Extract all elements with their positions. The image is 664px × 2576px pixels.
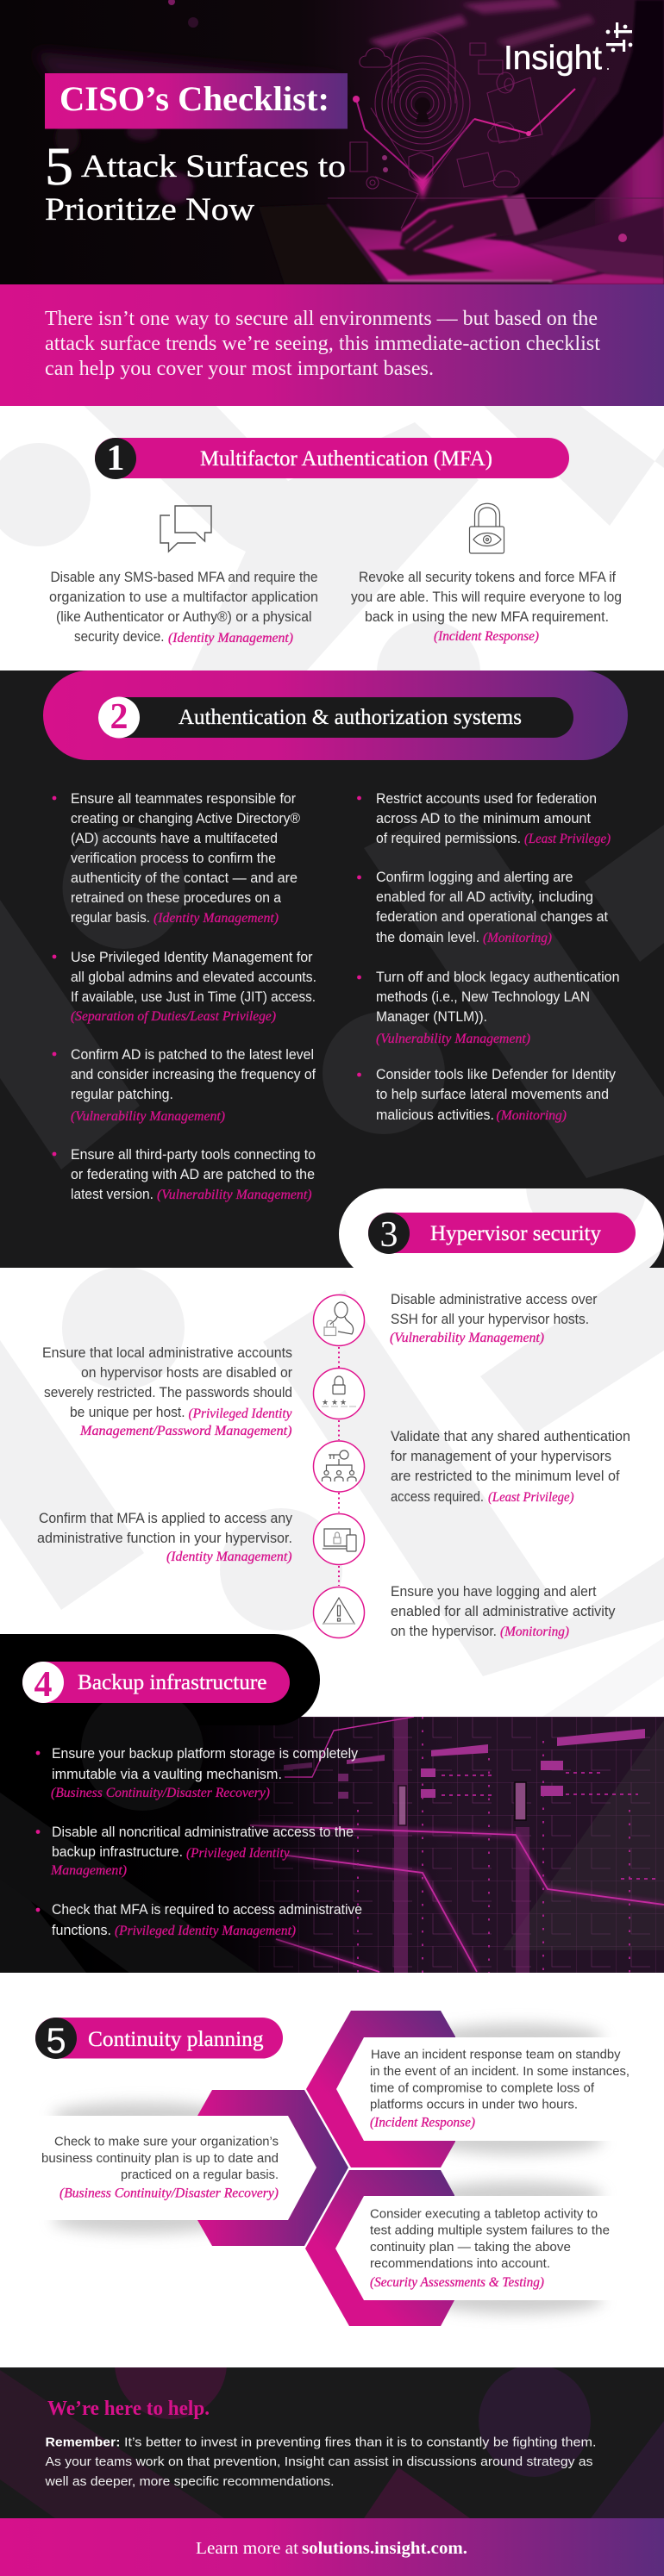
hypervisor text: shared authentication: access required. [391, 1489, 484, 1505]
hypervisor text: local accounts: be unique per host. [70, 1405, 185, 1420]
hypervisor text: local accounts: Ensure that local administrative accounts [42, 1345, 292, 1361]
intro band: can help you cover your most important bases. [45, 358, 434, 380]
hypervisor text: disable SSH: Disable administrative access over [391, 1292, 598, 1307]
hypervisor text: local accounts: Management/Password Management) [79, 1424, 291, 1438]
hypervisor text: MFA: (Identity Management) [166, 1550, 291, 1564]
section 2 bullet list: right column [357, 791, 619, 1123]
section 2 heading: Authentication & authorization systems [179, 706, 522, 729]
number badge 1: 1 [107, 439, 124, 478]
panel: section 3 background [0, 1188, 664, 1676]
panel: hex card bottom right: (Security Assessments & Testing) [370, 2275, 544, 2290]
hologram: padlock and security icons [350, 29, 542, 228]
section 2 bullet list: left column: regular patching. [71, 1087, 173, 1102]
hypervisor text: shared authentication [391, 1429, 630, 1505]
hypervisor text: local accounts: (Privileged Identity [188, 1407, 292, 1421]
hypervisor text: logging: Ensure you have logging and alert [391, 1584, 597, 1600]
section 2 bullet list: right column: to help surface lateral movements and [376, 1087, 609, 1102]
MFA text: right: Revoke all security tokens and force MFA if [359, 570, 616, 585]
number badge 5 [35, 2018, 77, 2061]
section 4 bullet list [36, 1746, 362, 1938]
hologram: glowing lines [328, 89, 664, 200]
panel: hex card left: Check to make sure your organization’s [54, 2134, 279, 2149]
title block [45, 73, 348, 228]
panel: footer help: As your teams work on that prevention, Insight can assist in discussions around strategy as [45, 2454, 593, 2469]
section 2 bullet list: left column: Ensure all third-party tools connecting to [71, 1147, 316, 1163]
section 4 bullet list: (Privileged Identity [186, 1846, 290, 1861]
panel: hex card left: (Business Continuity/Disaster Recovery) [60, 2186, 279, 2201]
icon: user with lock [314, 1294, 364, 1346]
section 2 heading [43, 671, 628, 760]
number badge 5: 5 [46, 2020, 66, 2061]
section 2 bullet list: left column: (Vulnerability Management) [71, 1109, 225, 1124]
icon: padlock with eye [469, 503, 504, 553]
section 4 bullet list: Check that MFA is required to access administrative [52, 1902, 362, 1918]
Insight logo [504, 22, 632, 77]
section 2 bullet list: left column: (Separation of Duties/Least Privilege) [71, 1009, 276, 1024]
MFA text: right: you are able. This will require everyone to log [351, 589, 622, 605]
Insight logo: Insight [504, 40, 602, 77]
section 2 bullet list: right column: (Monitoring) [483, 931, 552, 945]
section 4 bullet list: Management) [50, 1863, 127, 1878]
footer call to action: Learn more at [196, 2539, 298, 2558]
footer call to action: solutions.insight.com. [302, 2539, 467, 2558]
panel: hex card left: practiced on a regular basis. [121, 2167, 279, 2182]
hypervisor text: MFA: administrative function in your hypervisor. [37, 1531, 292, 1546]
panel: hex card left [34, 2090, 348, 2246]
icon: key and team [314, 1441, 364, 1492]
section 2 bullet list: left column [53, 791, 316, 1202]
section 2 bullet list: left column: (AD) accounts have a multifaceted [71, 831, 278, 846]
section 2 bullet list: left column: all global admins and elevated accounts. [71, 970, 316, 985]
intro band: attack surface trends we’re seeing, this immediate-action checklist [45, 333, 600, 355]
icon: laptop and phone with lock [314, 1513, 364, 1565]
hero photo background [0, 0, 664, 284]
hypervisor text: MFA [37, 1511, 293, 1564]
panel: section 4 circuit image [0, 1717, 664, 1973]
section 2 bullet list: left column: creating or changing Active Directory® [71, 811, 300, 826]
panel: footer help [0, 2367, 664, 2518]
icon: lock with password: ★ [340, 1399, 347, 1407]
number badge 4 [22, 1662, 64, 1705]
background pattern: section 1 [0, 406, 664, 671]
section 2 bullet list: right column: of required permissions. [376, 831, 521, 846]
section 2 bullet list: left column: If available, use Just in Time (JIT) access. [71, 989, 316, 1005]
icon: warning triangle [314, 1587, 364, 1637]
section 2 bullet list: right column: Restrict accounts used for federation [376, 791, 597, 807]
panel: hex card top right: in the event of an incident. In some instances, [370, 2064, 630, 2079]
section 2 bullet list: left column: (Vulnerability Management) [157, 1188, 312, 1202]
title block: Attack Surfaces to [81, 149, 346, 184]
footer call to action [0, 2518, 664, 2576]
section 2 bullet list: right column: federation and operational changes at [376, 909, 608, 925]
hypervisor text: local accounts: on hypervisor hosts are disabled or [81, 1365, 292, 1381]
hypervisor text: shared authentication: are restricted to the minimum level of [391, 1469, 620, 1484]
section 2 bullet list: left column: (Identity Management) [153, 911, 279, 926]
section 4 bullet list: Disable all noncritical administrative access to the [52, 1824, 354, 1840]
timeline connectors [338, 1347, 340, 1586]
section 2 bullet list: right column: Turn off and block legacy authentication [376, 970, 619, 985]
hypervisor text: shared authentication: Validate that any shared authentication [391, 1429, 630, 1444]
MFA text: right: back in using the new MFA requirement. [365, 609, 609, 625]
number badge 2: 2 [110, 697, 128, 737]
section 2 bullet list: right column: Manager (NTLM)). [376, 1009, 487, 1025]
section 5 heading [35, 2018, 283, 2061]
icon: lock with password: ★ [322, 1399, 329, 1407]
section 2 bullet list: right column: (Least Privilege) [524, 832, 611, 846]
section 2 bullet list: right column: malicious activities. [376, 1107, 494, 1123]
hypervisor text: local accounts [42, 1345, 292, 1438]
panel: hex card bottom right: Consider executing a tabletop activity to [370, 2206, 598, 2222]
section 3 heading: Hypervisor security [430, 1222, 601, 1245]
MFA text: left: organization to use a multifactor application [49, 589, 318, 605]
panel: footer help: It’s better to invest in preventing fires than it is to constantly be fighting them. [124, 2436, 597, 2449]
hypervisor text: disable SSH: (Vulnerability Management) [390, 1331, 544, 1345]
MFA text: left: security device. [74, 629, 164, 645]
section 2 bullet list: left column: Ensure all teammates responsible for [71, 791, 296, 807]
panel: hex card bottom right [305, 2170, 642, 2326]
intro band [0, 284, 664, 406]
panel: hex card top right: time of compromise to complete loss of [370, 2080, 595, 2096]
MFA text: left [49, 570, 318, 646]
section 4 bullet list: backup infrastructure. [52, 1844, 183, 1860]
panel: footer help: well as deeper, more specific recommendations. [44, 2474, 334, 2489]
number badge 4: 4 [34, 1665, 52, 1705]
section 2 bullet list: right column: (Monitoring) [497, 1108, 567, 1123]
icon: chat bubbles [160, 506, 211, 552]
section 2 bullet list: left column: regular basis. [71, 910, 150, 926]
section 2 bullet list: left column: retrained on these procedures on a [71, 890, 282, 906]
section 1 heading [95, 438, 569, 479]
section 2 bullet list: left column: verification process to confirm the [71, 851, 276, 866]
section 4 bullet list: functions. [52, 1923, 111, 1938]
MFA text: left: Disable any SMS-based MFA and require the [50, 570, 317, 585]
MFA text: left: (like Authenticator or Authy®) or a physical [56, 609, 312, 625]
section 2 bullet list: left column: Use Privileged Identity Management for [71, 950, 313, 965]
MFA text: right [351, 570, 622, 644]
icon: lock with password: ★ [331, 1399, 338, 1407]
panel: footer help: Remember: [45, 2436, 121, 2449]
intro band: There isn’t one way to secure all environments — but based on the [45, 308, 598, 330]
hypervisor text: logging: enabled for all administrative activity [391, 1604, 616, 1619]
panel: hex card top right: (Incident Response) [370, 2116, 475, 2130]
section 4 header block [0, 1634, 320, 1811]
hypervisor text: MFA: Confirm that MFA is applied to access any [39, 1511, 293, 1526]
hypervisor text: local accounts: severely restricted. The passwords should [44, 1385, 292, 1400]
section 2 bullet list: left column: Confirm AD is patched to the latest level [71, 1047, 314, 1063]
panel: hex card bottom right: test adding multiple system failures to the [370, 2224, 610, 2237]
panel: footer help: We’re here to help. [47, 2398, 210, 2420]
title block: Prioritize Now [45, 192, 254, 228]
section 3 heading [368, 1213, 636, 1255]
section 5 heading: Continuity planning [88, 2028, 264, 2051]
panel: hex card left: business continuity plan is up to date and [41, 2151, 279, 2166]
number badge 2 [98, 696, 140, 738]
hypervisor text: disable SSH: SSH for all your hypervisor hosts. [391, 1312, 589, 1327]
section 1 heading: Multifactor Authentication (MFA) [200, 447, 492, 471]
hypervisor text: disable SSH [390, 1292, 598, 1345]
section 2 bullet list: right column: Consider tools like Defender for Identity [376, 1067, 617, 1082]
MFA text: right: (Incident Response) [434, 629, 539, 644]
hypervisor text: shared authentication: for management of your hypervisors [391, 1449, 611, 1464]
section 2 bullet list: right column: (Vulnerability Management) [376, 1032, 530, 1046]
icon: lock with password [314, 1369, 364, 1419]
title banner [45, 73, 348, 129]
hypervisor text: logging: (Monitoring) [500, 1625, 569, 1639]
section 4 bullet list: Ensure your backup platform storage is completely [52, 1746, 359, 1762]
panel: hex card bottom right: continuity plan — taking the above [370, 2240, 571, 2255]
section 2 bullet list: right column: Confirm logging and alerting are [376, 870, 573, 885]
section 4 bullet list: immutable via a vaulting mechanism. [52, 1767, 282, 1782]
section 2 bullet list: left column: authenticity of the contact — and are [71, 870, 298, 886]
hypervisor text: logging [391, 1584, 616, 1639]
section 4 bullet list: (Privileged Identity Management) [115, 1924, 296, 1938]
panel: hex card top right [306, 2011, 642, 2167]
section 4 header block: Backup infrastructure [78, 1671, 267, 1694]
section 4 bullet list: (Business Continuity/Disaster Recovery) [51, 1786, 270, 1800]
section 2 bullet list: left column: latest version. [71, 1187, 153, 1202]
section 2 bullet list: right column: enabled for all AD activity, including [376, 889, 593, 905]
number badge 3: 3 [379, 1215, 398, 1255]
panel: section 2 background [0, 671, 664, 1268]
panel: hex card top right: Have an incident response team on standby [371, 2048, 621, 2062]
section 2 bullet list: right column: methods (i.e., New Technology LAN [376, 989, 590, 1005]
section 2 bullet list: left column: or federating with AD are patched to the [71, 1167, 315, 1182]
section 2 bullet list: left column: and consider increasing the frequency of [71, 1067, 316, 1082]
number badge 1 [95, 438, 136, 479]
panel: hex card top right: platforms occurs in under two hours. [370, 2098, 578, 2111]
number badge 3 [368, 1213, 410, 1255]
panel: hex card bottom right: recommendations into account. [370, 2256, 550, 2271]
MFA text: left: (Identity Management) [168, 631, 293, 646]
title block: 5 [45, 138, 73, 196]
section 2 bullet list: right column: across AD to the minimum amount [376, 811, 591, 826]
hypervisor text: shared authentication: (Least Privilege) [488, 1490, 574, 1505]
section 2 bullet list: right column: the domain level. [376, 930, 479, 945]
title block: CISO’s Checklist: [60, 79, 329, 118]
hypervisor text: logging: on the hypervisor. [391, 1624, 497, 1639]
